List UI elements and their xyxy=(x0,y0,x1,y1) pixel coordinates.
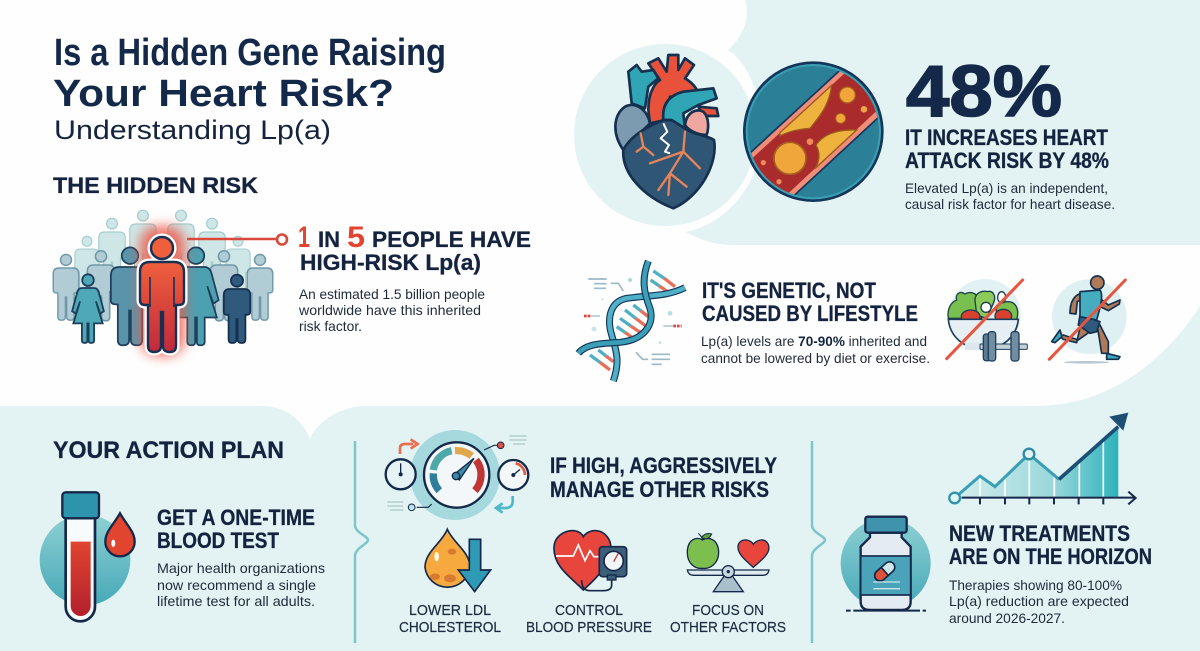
icon: pale circle behind heart xyxy=(574,44,756,226)
title xyxy=(53,32,446,115)
text: blood test xyxy=(157,560,325,609)
heading: blood test: GET A ONE-TIME xyxy=(157,505,315,530)
text: 1.5 billion people: An estimated 1.5 billion people xyxy=(299,286,485,302)
label: control blood pressure: BLOOD PRESSURE xyxy=(526,619,652,636)
icon: crossed-out runner xyxy=(1049,276,1127,364)
callout connector xyxy=(187,234,287,244)
text: blood test: lifetime test for all adults. xyxy=(157,593,315,609)
text: inherited: cannot be lowered by diet or exercise. xyxy=(701,350,930,366)
label: lower LDL xyxy=(399,602,501,636)
panel: heart attack risk xyxy=(574,0,1200,245)
text: blood test: now recommend a single xyxy=(157,577,316,593)
text: 1.5 billion people: risk factor. xyxy=(299,318,362,334)
heading: manage other risks: IF HIGH, AGGRESSIVELY xyxy=(550,453,777,478)
label: lower LDL: LOWER LDL xyxy=(409,602,491,619)
panel: hidden risk xyxy=(53,32,531,356)
stat: 48%: 48% xyxy=(906,52,1062,132)
icon: medicine bottle xyxy=(841,517,931,611)
icon: anatomical heart xyxy=(615,55,718,208)
heading: 1 in 5 people: 1 xyxy=(298,221,310,254)
text: inherited xyxy=(701,333,930,366)
icon: DNA helix xyxy=(578,261,685,381)
title: Your Heart Risk? xyxy=(53,73,394,115)
panel: genetic not lifestyle xyxy=(578,261,1127,381)
text: new treatments: around 2026-2027. xyxy=(949,610,1065,626)
label: focus on other factors xyxy=(670,602,786,636)
label: control blood pressure xyxy=(526,602,652,636)
text: causal risk factor: causal risk factor for heart disease. xyxy=(905,196,1115,212)
icon: heart with blood pressure cuff xyxy=(554,531,627,591)
icon: apple and heart on scale xyxy=(687,533,769,592)
heading: heart attack risk xyxy=(905,125,1109,173)
heading: 1 in 5 people: IN xyxy=(318,227,340,252)
heading: 1 in 5 people: HIGH-RISK Lp(a) xyxy=(300,250,481,275)
heading: heart attack risk: ATTACK RISK BY 48% xyxy=(905,148,1109,173)
heading: blood test xyxy=(157,505,315,553)
heading: blood test: BLOOD TEST xyxy=(157,528,279,553)
text: new treatments: Therapies showing 80-100% xyxy=(949,577,1122,593)
label: control blood pressure: CONTROL xyxy=(555,602,623,619)
icon: crossed-out salad and dumbbell xyxy=(947,279,1027,361)
title: Is a Hidden Gene Raising xyxy=(54,32,446,74)
label: focus on other factors: FOCUS ON xyxy=(692,602,764,619)
heading: new treatments: ARE ON THE HORIZON xyxy=(949,544,1152,569)
icon: clogged artery xyxy=(743,61,884,202)
heading: your action plan: YOUR ACTION PLAN xyxy=(53,437,284,464)
heading: manage other risks xyxy=(550,453,777,502)
text: new treatments: Lp(a) reduction are expected xyxy=(949,593,1129,609)
heading: genetic: IT'S GENETIC, NOT xyxy=(702,278,876,303)
text: 1.5 billion people xyxy=(298,286,485,334)
icon: blood test tube xyxy=(40,492,135,621)
label: lower LDL: CHOLESTEROL xyxy=(399,619,501,636)
subtitle: Understanding Lp(a) xyxy=(54,115,331,145)
icon: LDL drop with down arrow xyxy=(425,529,491,592)
chart: rising treatment trend xyxy=(949,413,1136,504)
arrow: divider chevron 1 xyxy=(355,441,368,643)
icon: blood pressure gauges xyxy=(386,430,528,520)
heading: genetic xyxy=(702,278,918,326)
heading: 1 in 5 people xyxy=(298,221,531,275)
heading: 1 in 5 people: PEOPLE HAVE xyxy=(372,227,531,252)
heading: genetic: CAUSED BY LIFESTYLE xyxy=(702,301,918,326)
text: causal risk factor: Elevated Lp(a) is an independent, xyxy=(905,180,1108,196)
text: new treatments xyxy=(949,577,1129,626)
panel: your action plan xyxy=(0,306,1200,651)
heading: heart attack risk: IT INCREASES HEART xyxy=(905,125,1108,150)
arrow: divider chevron 2 xyxy=(812,441,825,643)
text: 1.5 billion people: worldwide have this inherited xyxy=(298,302,481,318)
label: focus on other factors: OTHER FACTORS xyxy=(670,619,786,636)
text: causal risk factor xyxy=(905,180,1115,212)
heading: the hidden risk: THE HIDDEN RISK xyxy=(53,173,258,198)
text: inherited: Lp(a) levels are 70-90% inherited and xyxy=(701,333,927,349)
heading: new treatments xyxy=(949,521,1152,569)
text: blood test: Major health organizations xyxy=(157,560,325,576)
heading: 1 in 5 people: 5 xyxy=(347,221,365,254)
icon: crowd with highlighted person xyxy=(53,210,273,356)
heading: new treatments: NEW TREATMENTS xyxy=(949,521,1130,546)
heading: manage other risks: MANAGE OTHER RISKS xyxy=(550,477,769,502)
